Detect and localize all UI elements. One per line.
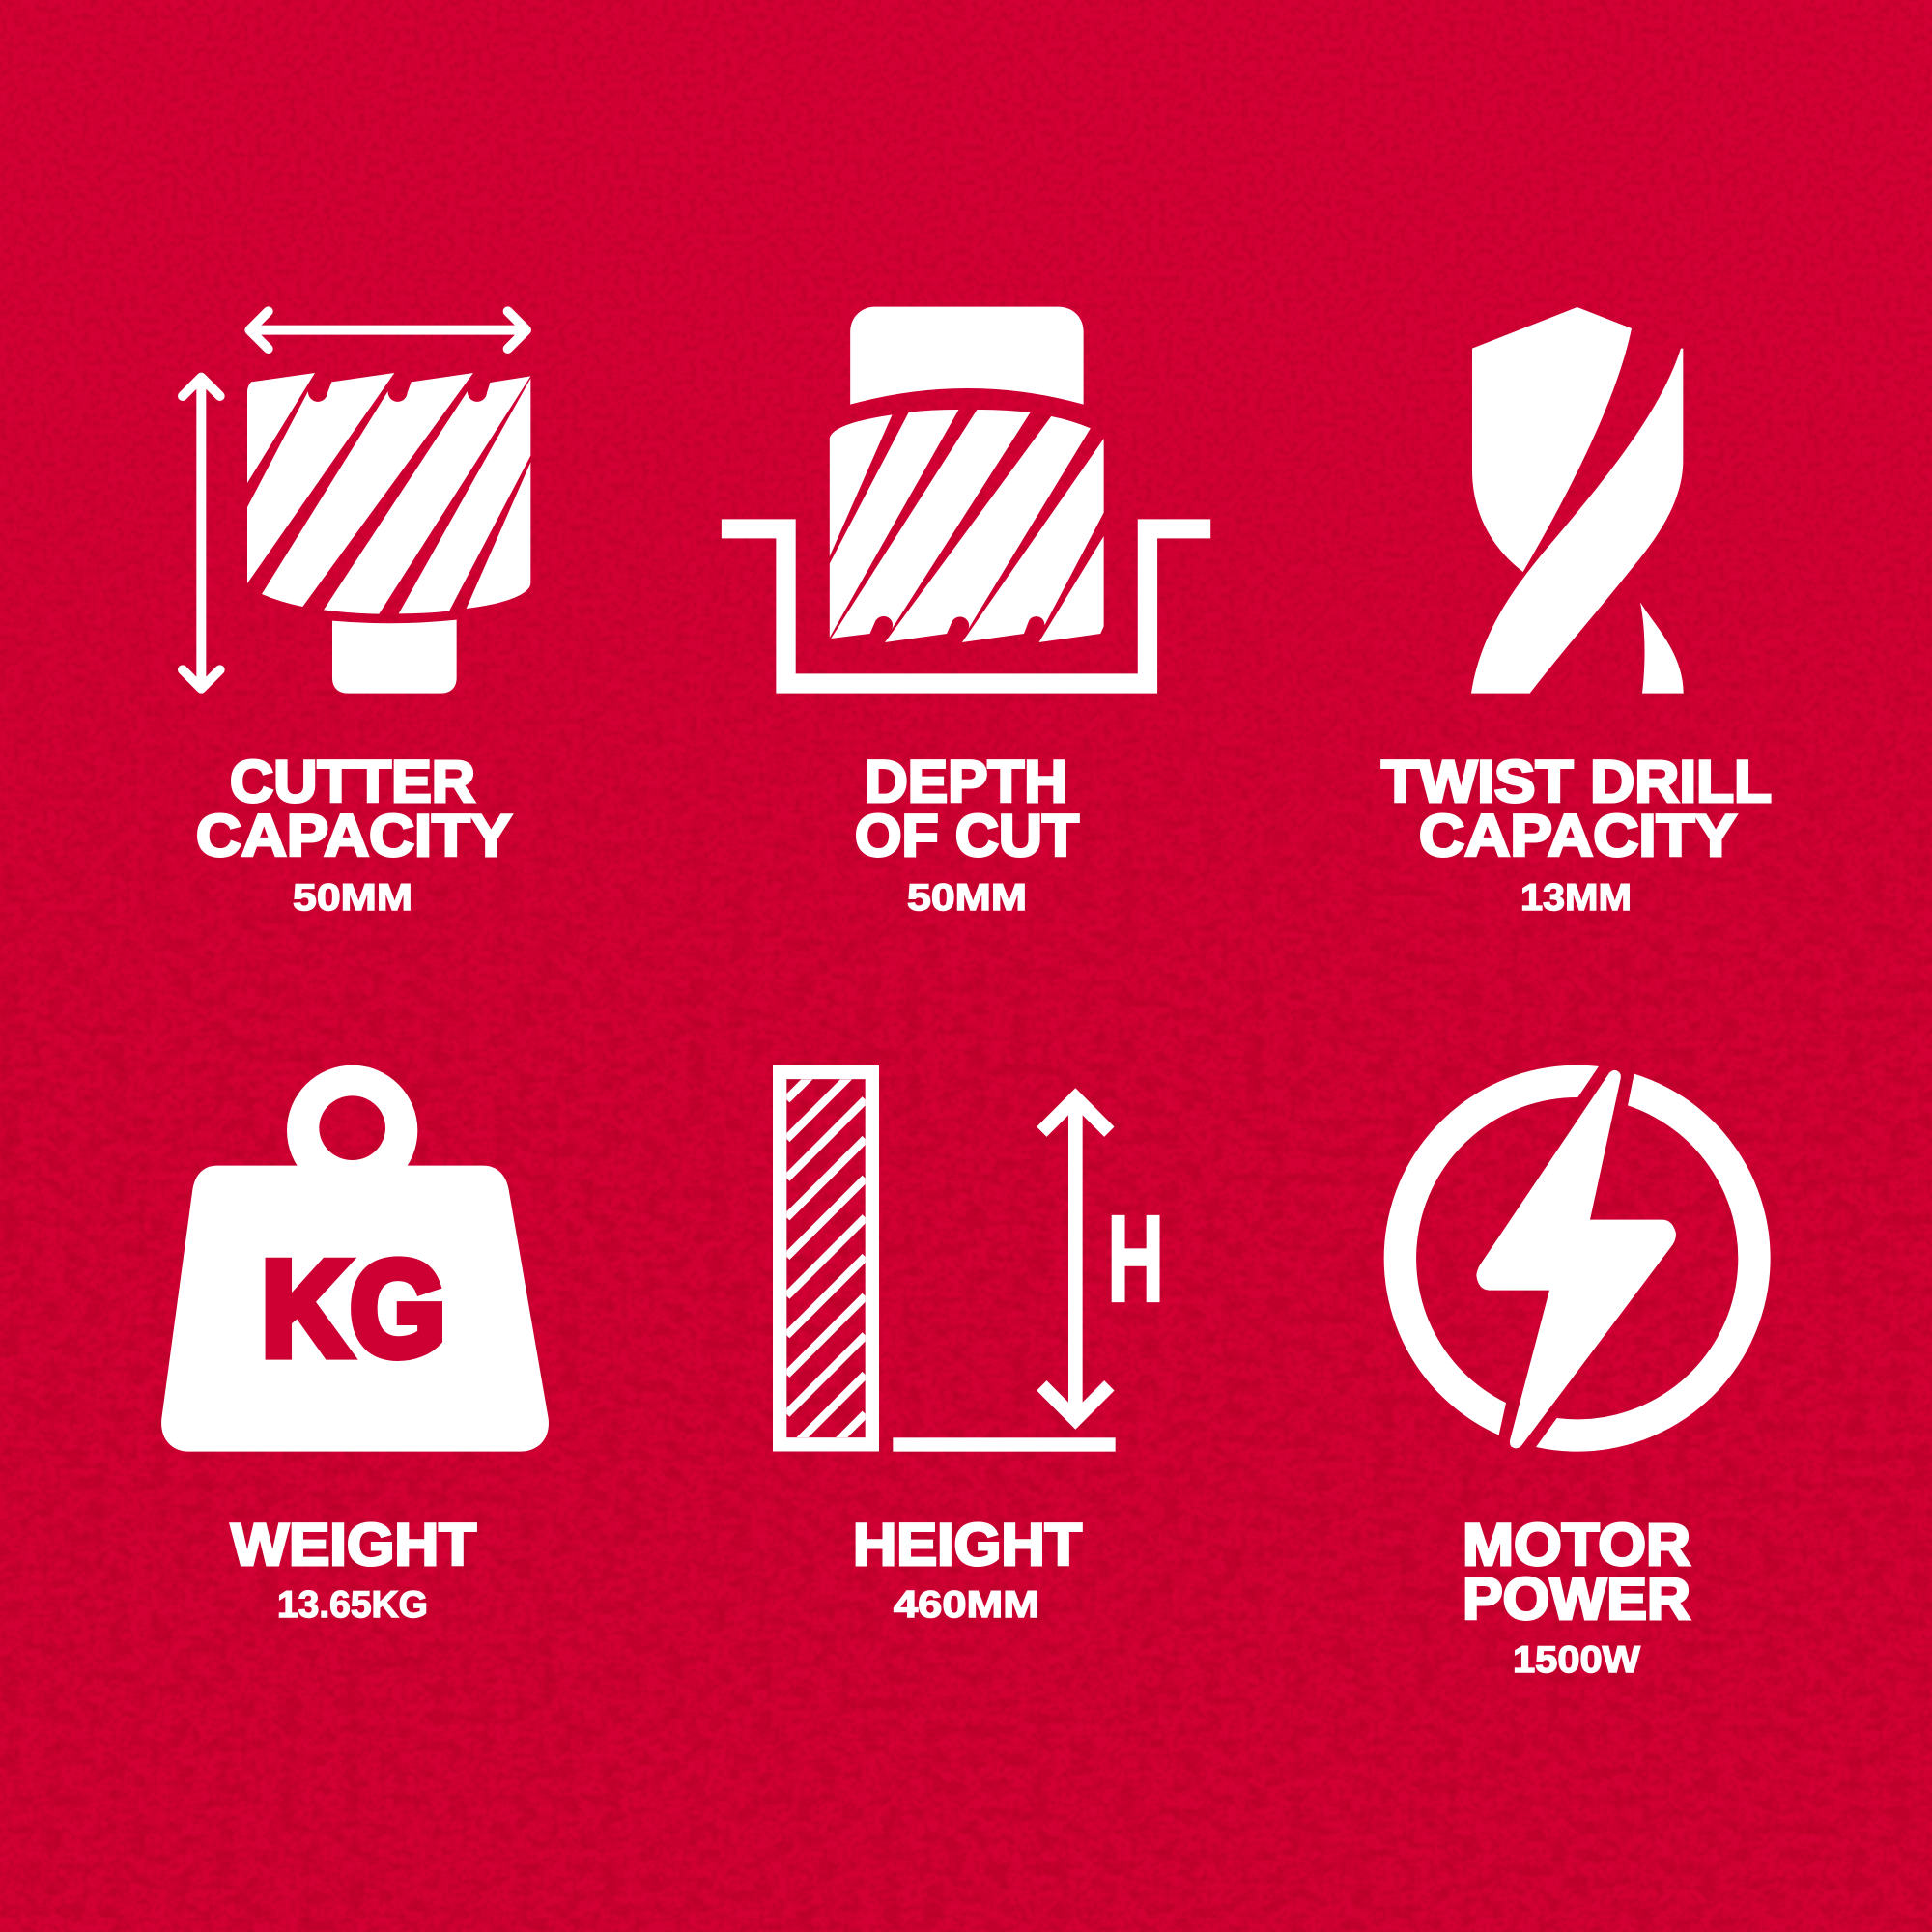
icon: kettlebell weight with KG: KG <box>262 1234 445 1384</box>
heading: height: HEIGHT <box>853 1512 1082 1577</box>
icon: lightning bolt in ring <box>1384 1065 1771 1452</box>
icon: hatched column with height arrow <box>773 1065 1159 1452</box>
heading: cutter capacity <box>196 749 512 868</box>
heading: twist drill capacity: CAPACITY <box>1419 803 1737 868</box>
icon: hatched column with height arrow: H <box>1107 1190 1164 1327</box>
icon: cutter with dimension arrows <box>183 311 530 694</box>
panel: cutter capacity <box>183 311 530 919</box>
heading: depth of cut <box>855 749 1079 868</box>
value: 50mm: 50MM <box>293 877 412 919</box>
heading: twist drill capacity: TWIST DRILL <box>1381 749 1772 814</box>
heading: weight: WEIGHT <box>231 1512 476 1577</box>
heading: cutter capacity: CUTTER <box>230 749 475 814</box>
heading: depth of cut: OF CUT <box>855 803 1079 868</box>
icon: kettlebell weight with KG <box>161 1065 549 1452</box>
value: 13.65kg: 13.65KG <box>277 1584 428 1626</box>
panel: depth of cut <box>722 307 1210 919</box>
heading: twist drill capacity <box>1381 749 1772 868</box>
value: 13mm: 13MM <box>1520 877 1632 919</box>
panel: motor power <box>1384 1065 1771 1681</box>
heading: motor power: MOTOR <box>1463 1512 1690 1577</box>
value: 1500w: 1500W <box>1513 1639 1641 1681</box>
panel: twist drill capacity <box>1381 307 1772 919</box>
value: 50mm: 50MM <box>907 877 1027 919</box>
heading: cutter capacity: CAPACITY <box>196 803 512 868</box>
icon: twist drill bit <box>1471 307 1684 694</box>
panel: weight <box>161 1065 549 1626</box>
value: 460mm: 460MM <box>894 1584 1039 1626</box>
heading: motor power <box>1463 1512 1690 1632</box>
heading: depth of cut: DEPTH <box>865 749 1067 814</box>
panel: height <box>780 1021 1164 1626</box>
icon: cutter in workpiece <box>722 307 1210 694</box>
heading: motor power: POWER <box>1463 1566 1690 1632</box>
